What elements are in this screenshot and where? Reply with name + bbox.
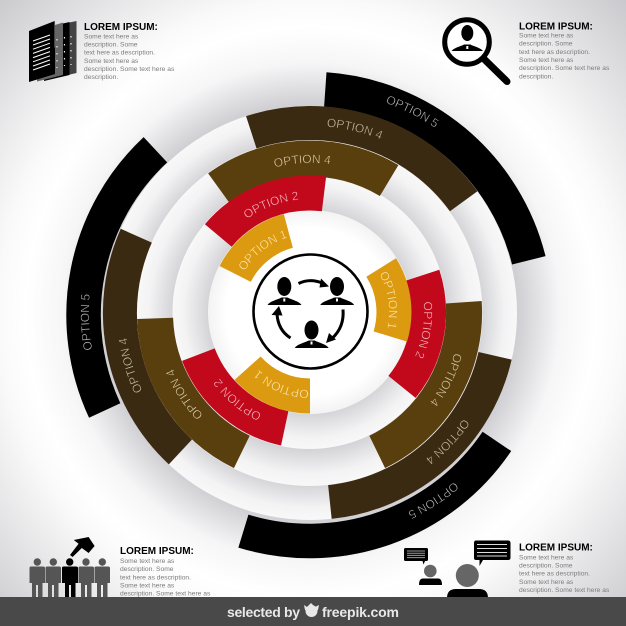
icon: central team cycle — [254, 254, 368, 368]
icon: group of people with pointer — [30, 537, 110, 598]
text block: bottom right: Some text here as — [519, 554, 574, 562]
option labels: OPTION 4 — [274, 154, 330, 167]
option labels: OPTION 1 — [239, 230, 287, 270]
text block: top right: description. — [519, 73, 553, 80]
text block: top left: Some text here as — [84, 58, 139, 65]
option labels: OPTION 5 — [408, 483, 458, 519]
option labels: OPTION 1 — [254, 370, 308, 398]
icon: magnifier with person — [445, 20, 507, 82]
option labels: OPTION 5 — [387, 96, 439, 127]
option labels: OPTION 4 — [426, 420, 468, 464]
text block: top right: LOREM IPSUM: — [519, 22, 593, 32]
option labels: OPTION 4 — [430, 354, 462, 406]
text block: bottom right: text here as description. — [519, 571, 590, 578]
option labels — [80, 96, 468, 519]
text block: top left: description. — [84, 74, 118, 81]
text block: bottom left: Some text here as — [120, 558, 175, 565]
text block: top right: Some text here as — [519, 57, 574, 64]
text block: bottom right: LOREM IPSUM: — [519, 542, 593, 554]
text block: top right — [519, 22, 610, 80]
icon: documents — [29, 21, 76, 82]
option labels: OPTION 2 — [415, 302, 432, 358]
text block: top left: description. Some — [84, 42, 138, 48]
footer bar: selected by — [227, 604, 300, 620]
icon: two people talking — [404, 540, 510, 598]
ring segments: dark brown option 4 — [120, 123, 495, 502]
text block: top left: description. Some text here as — [84, 66, 175, 73]
text block: bottom right: description. Some text here as — [519, 587, 610, 594]
text block: top right: text here as description. — [519, 49, 590, 56]
text block: bottom left — [120, 546, 211, 598]
option labels: OPTION 4 — [118, 338, 142, 393]
option labels: OPTION 2 — [214, 378, 260, 420]
option labels: OPTION 1 — [380, 272, 398, 328]
text block: top right: description. Some text here as — [519, 65, 610, 72]
footer bar — [0, 597, 626, 626]
text block: top right: Some text here as — [519, 33, 574, 40]
text block: top left: LOREM IPSUM: — [84, 22, 158, 33]
text block: bottom left: LOREM IPSUM: — [120, 546, 194, 557]
text block: top left: text here as description. — [84, 50, 155, 57]
text block: top right: description. Some — [519, 41, 573, 48]
option labels: OPTION 2 — [244, 192, 298, 218]
option labels: OPTION 5 — [80, 294, 92, 350]
footer bar: freepik.com — [322, 604, 399, 620]
ring segments: orange option 1 — [235, 231, 394, 396]
option labels: OPTION 4 — [166, 370, 202, 419]
text block: top left: Some text here as — [84, 34, 139, 40]
ring segments: red option 2 — [198, 193, 429, 428]
white concentric discs — [103, 106, 517, 520]
ring segments: brown option 4 — [155, 159, 464, 452]
text block: bottom left: description. Some — [120, 566, 174, 573]
text block: bottom left: Some text here as — [120, 582, 175, 590]
text block: bottom left: text here as description. — [120, 574, 191, 581]
text block: bottom right — [519, 542, 610, 594]
text block: bottom left: description. Some text here as — [120, 591, 211, 598]
text block: bottom right: description. Some — [519, 563, 573, 570]
text block: top left — [84, 22, 175, 81]
ring segments: black option 5 — [84, 90, 529, 541]
option labels: OPTION 4 — [328, 118, 382, 139]
text block: bottom right: Some text here as — [519, 579, 574, 586]
